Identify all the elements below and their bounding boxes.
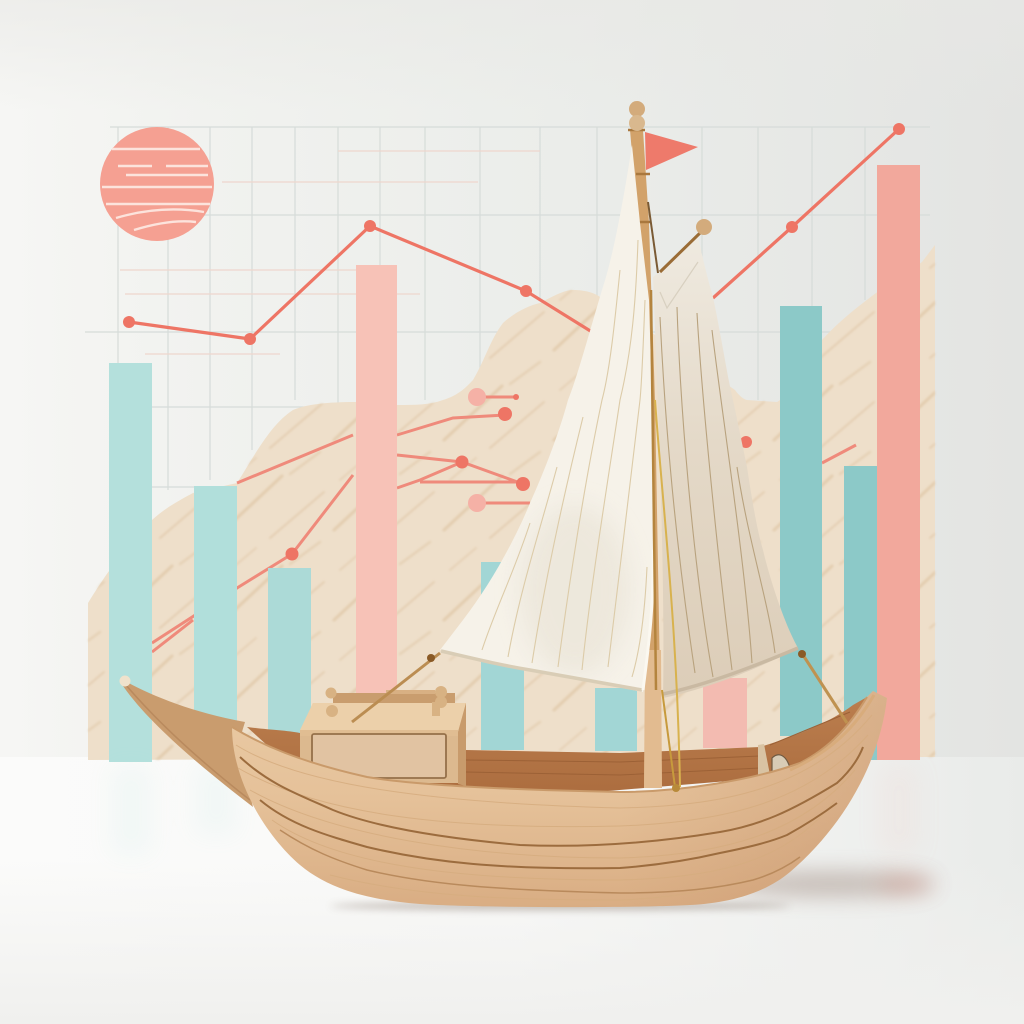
sun disc with stripes <box>100 127 214 241</box>
hull <box>232 690 890 910</box>
chart grid <box>85 127 930 500</box>
bar: teal 3 <box>268 568 311 733</box>
bar: teal 7 <box>844 466 886 760</box>
mast <box>628 101 662 788</box>
floor reflection of bars <box>110 765 920 855</box>
bar: teal 1 <box>109 363 152 762</box>
bar: pink 3 <box>877 165 920 760</box>
bow prow <box>120 676 253 807</box>
wood hills backdrop <box>88 245 935 760</box>
left boom <box>352 653 440 722</box>
interior plank seams <box>466 712 850 775</box>
bar: teal 5 <box>595 688 637 751</box>
hull interior <box>247 697 867 800</box>
right sail <box>653 237 798 698</box>
boat shadow <box>330 871 935 910</box>
bar: pink 2 <box>703 678 747 748</box>
background wall <box>0 0 1024 760</box>
bar: teal 6 <box>780 306 822 736</box>
left sail <box>440 145 653 692</box>
bar: teal 2 <box>194 486 237 760</box>
upper trend line <box>123 123 905 345</box>
cabin box <box>300 686 466 786</box>
rigging ropes <box>655 400 847 792</box>
bar: teal 4 <box>481 562 524 750</box>
bar: pink 1 <box>356 265 397 693</box>
upper yard and stay <box>648 202 712 690</box>
sailboat <box>120 101 890 910</box>
small deck fitting <box>758 744 790 775</box>
floor <box>0 757 1024 1024</box>
lower trend lines behind bars <box>152 388 856 652</box>
pennant flag <box>645 132 698 170</box>
